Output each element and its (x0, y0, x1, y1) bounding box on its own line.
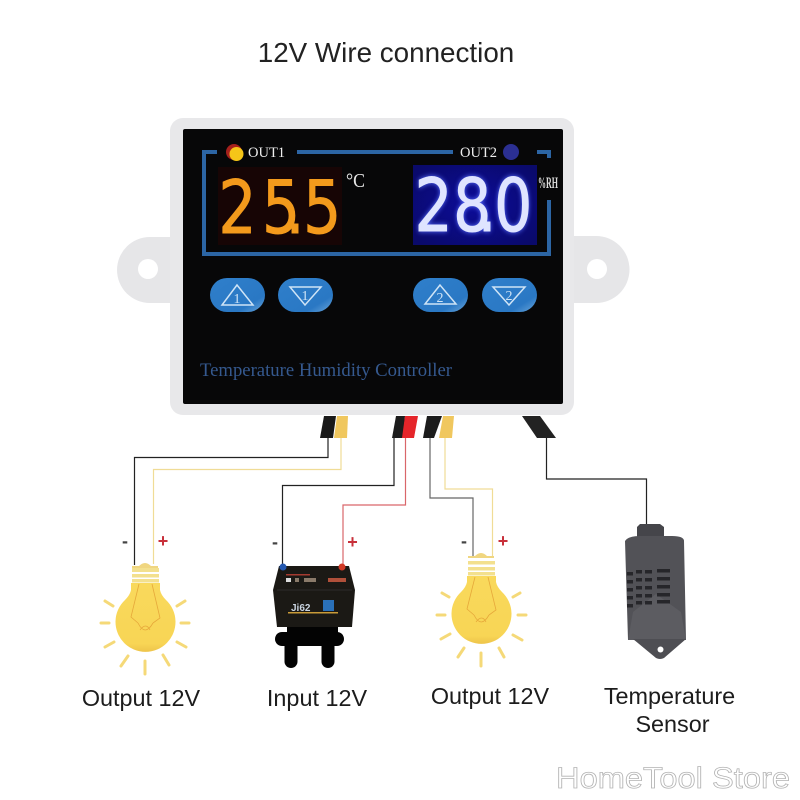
LED out1 (226, 144, 244, 161)
reading 28.0: 2 (414, 163, 453, 248)
reading 28.0: 8 (453, 163, 491, 248)
label: output 1: Output 12V (82, 685, 201, 711)
mounting ear left (117, 237, 172, 303)
battery body (273, 566, 355, 627)
wires output 1 (134, 438, 341, 565)
reading 25.5: 5 (262, 165, 300, 250)
panel product name: Temperature Humidity Controller (200, 360, 453, 381)
button 1 up: 1 (234, 292, 240, 307)
blue frame (204, 152, 549, 254)
OUT2 label: OUT2 (460, 145, 497, 161)
output 1 plus: + (158, 531, 168, 551)
output 2 plus: + (498, 531, 508, 551)
watermark: HomeTool Store (556, 762, 790, 795)
label: output 2: Output 12V (431, 683, 550, 709)
label: temperature sensor: Temperature (604, 683, 735, 709)
polarity signs (122, 531, 508, 552)
button 2 up (413, 278, 468, 312)
degree C unit: °C (346, 170, 365, 192)
OUT1 label: OUT1 (248, 145, 285, 161)
wire stubs (320, 416, 556, 438)
label: temperature sensor (604, 683, 735, 737)
button 2 down (482, 278, 537, 312)
wires input (282, 438, 406, 566)
wires output 2 (430, 438, 492, 556)
controller device (117, 118, 630, 415)
button 1 down: 1 (302, 289, 308, 304)
icon: battery (273, 564, 355, 668)
red display (218, 165, 342, 250)
battery logo: Ji62 (291, 603, 311, 614)
LED out2 (503, 144, 519, 160)
blue display (413, 163, 537, 248)
mounting ear right (572, 236, 630, 303)
black front panel (183, 129, 563, 404)
button 2 down: 2 (506, 289, 512, 304)
output 1 minus: - (122, 531, 128, 551)
button 2 up: 2 (436, 291, 444, 306)
reading 25.5: 2 (218, 165, 257, 250)
label: input: Input 12V (267, 685, 367, 711)
input minus: - (272, 532, 278, 552)
sensor vents (627, 569, 670, 608)
reading 28.0: 0 (494, 163, 532, 248)
wire sensor (546, 438, 646, 525)
icon: bulb output 1 (101, 563, 189, 674)
reading 25.5: . (285, 165, 305, 250)
label: temperature sensor: Sensor (635, 711, 710, 737)
case (170, 118, 574, 415)
reading 28.0: . (477, 163, 497, 248)
icon: bulb output 2 (437, 553, 526, 666)
title: 12V Wire connection (258, 37, 514, 68)
output 2 minus: - (461, 531, 467, 551)
reading 25.5: 5 (303, 165, 341, 250)
input plus: + (347, 532, 358, 552)
button 1 up (210, 278, 265, 312)
battery stand (275, 625, 344, 668)
icon: temperature sensor (625, 524, 686, 659)
%RH unit: %RH (538, 175, 558, 192)
button 1 down (278, 278, 333, 312)
